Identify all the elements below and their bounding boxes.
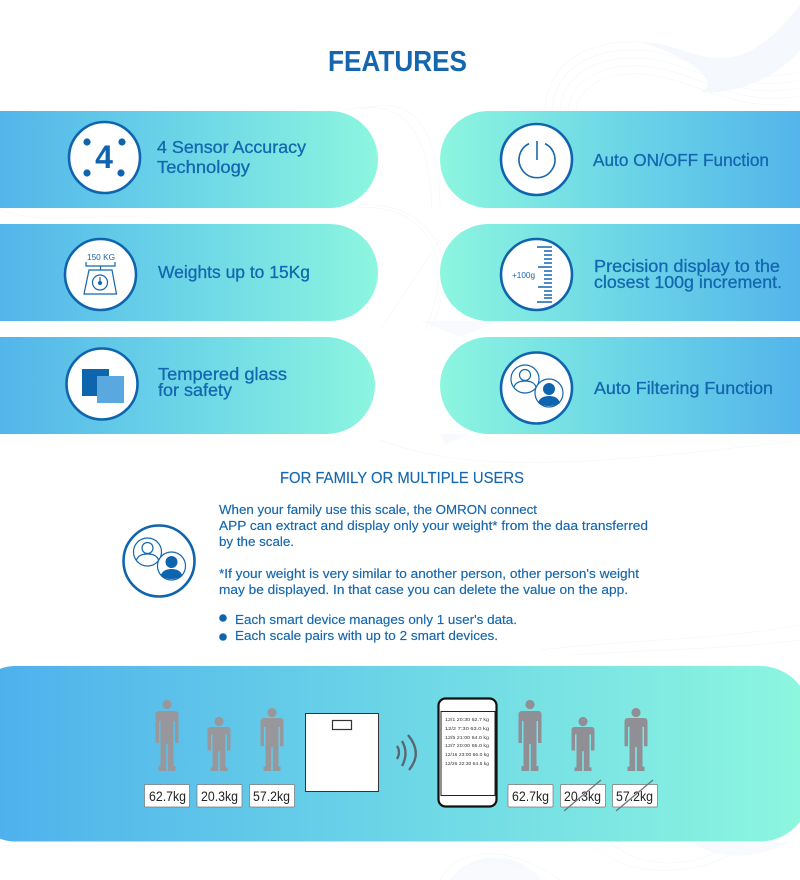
wireless signal <box>397 735 416 770</box>
text block: family description: When your family use this scale, the OMRON connect <box>219 502 537 517</box>
icon: kitchen scale: 150 KG <box>87 253 115 262</box>
panel: weights up to 15kg <box>0 224 378 321</box>
icon: ruler: +100g <box>512 271 535 280</box>
panel: data filtering diagram <box>0 666 800 842</box>
text block: family description: may be displayed. In that case you can delete the value on the app. <box>219 582 628 597</box>
label: 4 sensor accuracy technology <box>157 137 306 177</box>
weight labels: filtered: 57.2kg <box>616 788 653 804</box>
label: tempered glass for safety: Tempered glass <box>158 364 287 384</box>
text block: family description: *If your weight is very similar to another person, other person's weight <box>219 566 639 581</box>
smartphone: 12/26 22:30 64.5 kg <box>445 761 490 766</box>
label: weights up to 15kg: Weights up to 15Kg <box>158 262 310 282</box>
heading: for family or multiple users: FOR FAMILY OR MULTIPLE USERS <box>280 470 524 487</box>
weight labels: all users <box>144 784 294 807</box>
icon: glass squares <box>66 348 138 420</box>
label: tempered glass for safety <box>158 364 287 400</box>
text block: family description: APP can extract and display only your weight* from the daa transferred <box>219 518 648 533</box>
icon: four sensors <box>69 122 140 193</box>
smartphone: 12/5 21:00 64.0 kg <box>445 735 490 740</box>
weight labels: filtered: 62.7kg <box>512 788 549 804</box>
bullet list <box>219 612 517 643</box>
panel: auto filtering <box>440 337 800 434</box>
label: 4 sensor accuracy technology: 4 Sensor Accuracy <box>157 137 306 157</box>
weight labels: filtered <box>508 780 658 811</box>
icon: ruler <box>501 239 572 310</box>
label: 4 sensor accuracy technology: Technology <box>157 157 250 177</box>
smartphone <box>438 698 496 806</box>
bullet list: Each scale pairs with up to 2 smart devices. <box>235 628 498 643</box>
smartphone: 12/1 20:30 62.7 kg <box>445 717 490 722</box>
smartphone: 12/2 7:30 63.0 kg <box>445 726 490 731</box>
bathroom scale <box>306 714 378 792</box>
icon: kitchen scale <box>65 239 136 310</box>
icon: family users <box>124 526 194 596</box>
icon: power <box>501 124 572 195</box>
text block: family description <box>219 502 648 597</box>
title: FEATURES <box>328 46 467 78</box>
panel: tempered glass <box>0 337 375 434</box>
weight labels: all users: 57.2kg <box>253 788 290 804</box>
text block: family description: by the scale. <box>219 534 294 549</box>
weight labels: all users: 62.7kg <box>149 788 186 804</box>
icon: four sensors: 4 <box>95 139 113 175</box>
panel: precision display <box>440 224 800 321</box>
label: precision display: Precision display to the <box>594 256 780 276</box>
bullet list: Each smart device manages only 1 user's data. <box>235 612 517 627</box>
label: precision display <box>594 256 782 292</box>
label: tempered glass for safety: for safety <box>158 380 232 400</box>
icon: two users <box>501 352 572 424</box>
people after filtering <box>518 700 648 771</box>
people on the scale <box>156 700 284 771</box>
smartphone: 12/16 23:00 66.0 kg <box>445 752 490 757</box>
label: auto on/off function: Auto ON/OFF Function <box>593 150 769 170</box>
weight labels: all users: 20.3kg <box>201 788 238 804</box>
panel: 4 sensor accuracy <box>0 111 378 208</box>
panel: auto on/off <box>440 111 800 208</box>
label: auto filtering function: Auto Filtering Function <box>594 378 773 398</box>
weight labels: filtered: 20.3kg <box>564 788 601 804</box>
label: precision display: closest 100g increment. <box>594 272 782 292</box>
smartphone: 12/7 20:00 65.0 kg <box>445 743 490 748</box>
